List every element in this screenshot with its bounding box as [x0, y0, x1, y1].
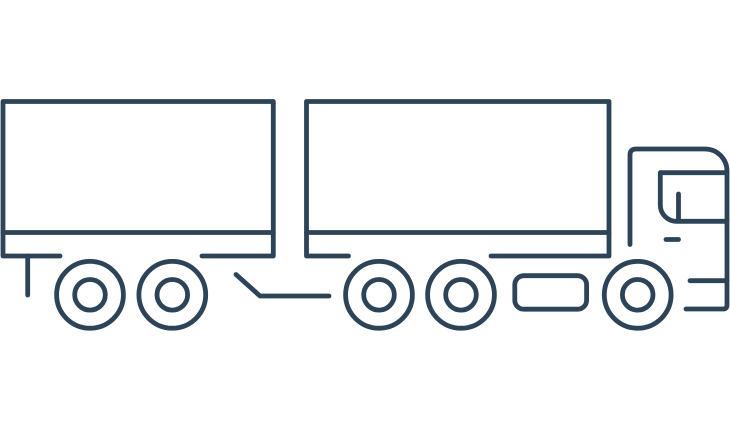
front wheel: [604, 261, 671, 328]
wheel 1: [57, 261, 123, 328]
wheel 3: [346, 261, 412, 328]
cab outline: [630, 149, 727, 309]
rear trailer: [3, 102, 273, 295]
front trailer lower rail: [306, 230, 609, 235]
fuel tank: [515, 276, 587, 309]
front trailer box body: [306, 102, 609, 256]
tow bar: [236, 274, 329, 296]
front trailer: [306, 102, 609, 256]
rear trailer lower rail: [3, 230, 273, 235]
cab window: [660, 173, 727, 221]
wheel 2: [139, 261, 206, 328]
wheel 4: [428, 261, 494, 328]
window pillar: [676, 194, 681, 221]
rear trailer wheels: [57, 261, 206, 328]
rear trailer box body: [3, 102, 273, 256]
truck cab: [630, 149, 727, 309]
door handle: [666, 237, 678, 242]
truck rear wheels: [346, 261, 494, 328]
bumper line: [690, 278, 727, 283]
rear trailer support leg: [25, 256, 30, 295]
